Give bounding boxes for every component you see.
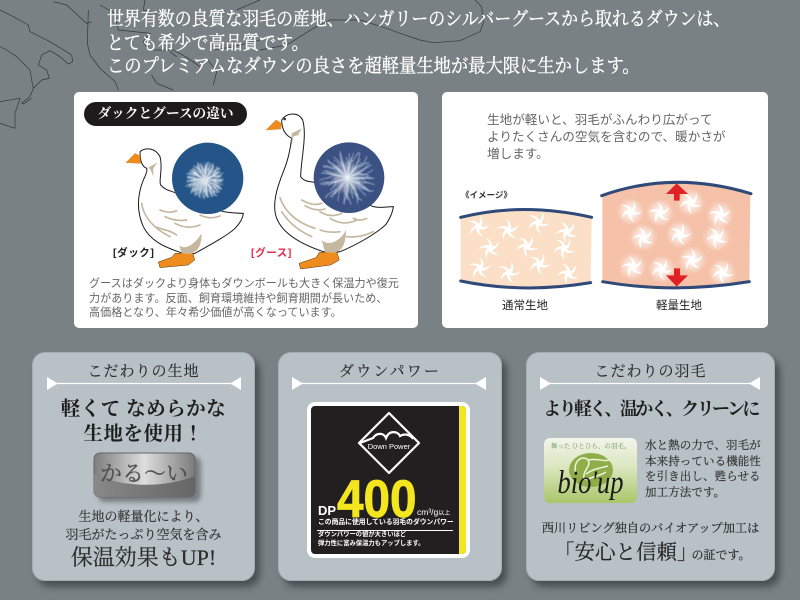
- duck: [126, 143, 243, 268]
- background map lines: [0, 0, 484, 129]
- diamond logo: [358, 412, 420, 474]
- description text: グースはダックより身体もダウンボールも大きく保温力や復元: [89, 278, 399, 290]
- button: karu-i: かる〜い: [100, 461, 188, 486]
- title rule with arrows: [540, 377, 760, 390]
- panel: down power: [278, 352, 502, 581]
- panel: light fabric explanation: [442, 92, 768, 328]
- label: normal fabric: 通常生地: [502, 300, 548, 312]
- label: goose: [グース]: [251, 247, 292, 259]
- panel: feather: [526, 352, 775, 581]
- unit: cm³/g以上: [417, 507, 450, 517]
- title rule with arrows: [292, 377, 486, 390]
- headline text: [107, 8, 730, 77]
- normal fabric: [461, 208, 592, 290]
- panel: fabric: [32, 352, 255, 581]
- button: karu-i: [94, 452, 204, 505]
- explanation text: 生地が軽いと、羽毛がふんわり広がって: [487, 113, 713, 127]
- label: duck: [ダック]: [113, 247, 154, 259]
- bio up logo: 舞った ひとひら、の羽毛。: [551, 441, 630, 450]
- panel: duck and goose difference: [74, 92, 418, 328]
- trust statement: 「安心と信頼」の証です。: [554, 542, 751, 564]
- bio up logo: [544, 438, 637, 503]
- method description: を引き出し、甦らせる: [645, 471, 761, 483]
- fabric diagram: [459, 180, 752, 290]
- light fabric: [602, 182, 751, 288]
- headline text: とても希少で高品質です。: [107, 33, 309, 54]
- description text: 高価格となり、年々希少価値が高くなっています。: [89, 307, 342, 319]
- yellow strip: [459, 406, 466, 554]
- headline text: 世界有数の良質な羽毛の産地、ハンガリーのシルバーグースから取れるダウンは、: [107, 9, 730, 30]
- method description: 本来持っている機能性: [645, 456, 761, 468]
- body text: [65, 509, 222, 542]
- warmth claim: 保温効果もUP!: [71, 545, 216, 570]
- badge note: ダウンパワーの値が大きいほど: [318, 531, 406, 538]
- bio up statement: 西川リビング独自のバイオアップ加工は: [542, 521, 759, 535]
- 400 value: 400: [337, 470, 417, 529]
- card title: こだわりの生地: [87, 364, 200, 380]
- explanation text: 増します。: [487, 147, 549, 161]
- method description: [645, 439, 761, 498]
- body text: 羽毛がたっぷり空気を含み: [65, 526, 222, 542]
- main statement: [61, 398, 226, 445]
- body text: 生地の軽量化により、: [78, 509, 208, 524]
- DP label: DP: [318, 503, 336, 518]
- main statement: より軽く、温かく、クリーンに: [543, 399, 758, 419]
- illustration: duck and goose: [126, 114, 394, 270]
- badge note: [318, 531, 424, 546]
- main statement: 軽くて なめらかな: [61, 399, 226, 420]
- diamond logo: Down Power: [368, 442, 411, 451]
- explanation text: よりたくさんの空気を含むので、暖かさが: [487, 130, 726, 144]
- explanation text: [487, 113, 726, 161]
- goose: [266, 114, 393, 269]
- method description: 加工方法です。: [645, 486, 725, 498]
- badge caption: この商品に使用している羽毛のダウンパワー: [318, 519, 454, 526]
- heading pill: ダックとグースの違い: [97, 106, 234, 121]
- headline text: このプレミアムなダウンの良さを超軽量生地が最大限に生かします。: [107, 56, 640, 77]
- description text: 力があります。反面、飼育環境維持や飼育期間が長いため、: [89, 293, 387, 305]
- card title: ダウンパワー: [339, 364, 441, 380]
- label: light fabric: 軽量生地: [656, 300, 702, 312]
- description text: [89, 277, 399, 319]
- badge note: 弾力性に富み保温力もアップします。: [318, 540, 424, 546]
- method description: 水と熱の力で、羽毛が: [645, 440, 761, 452]
- card title: こだわりの羽毛: [594, 364, 706, 380]
- main statement: 生地を使用！: [83, 424, 204, 445]
- image label: 《イメージ》: [461, 190, 512, 200]
- badge rule: [317, 530, 453, 531]
- heading pill: [84, 102, 247, 126]
- down power badge: [307, 402, 470, 558]
- title rule with arrows: [47, 377, 241, 390]
